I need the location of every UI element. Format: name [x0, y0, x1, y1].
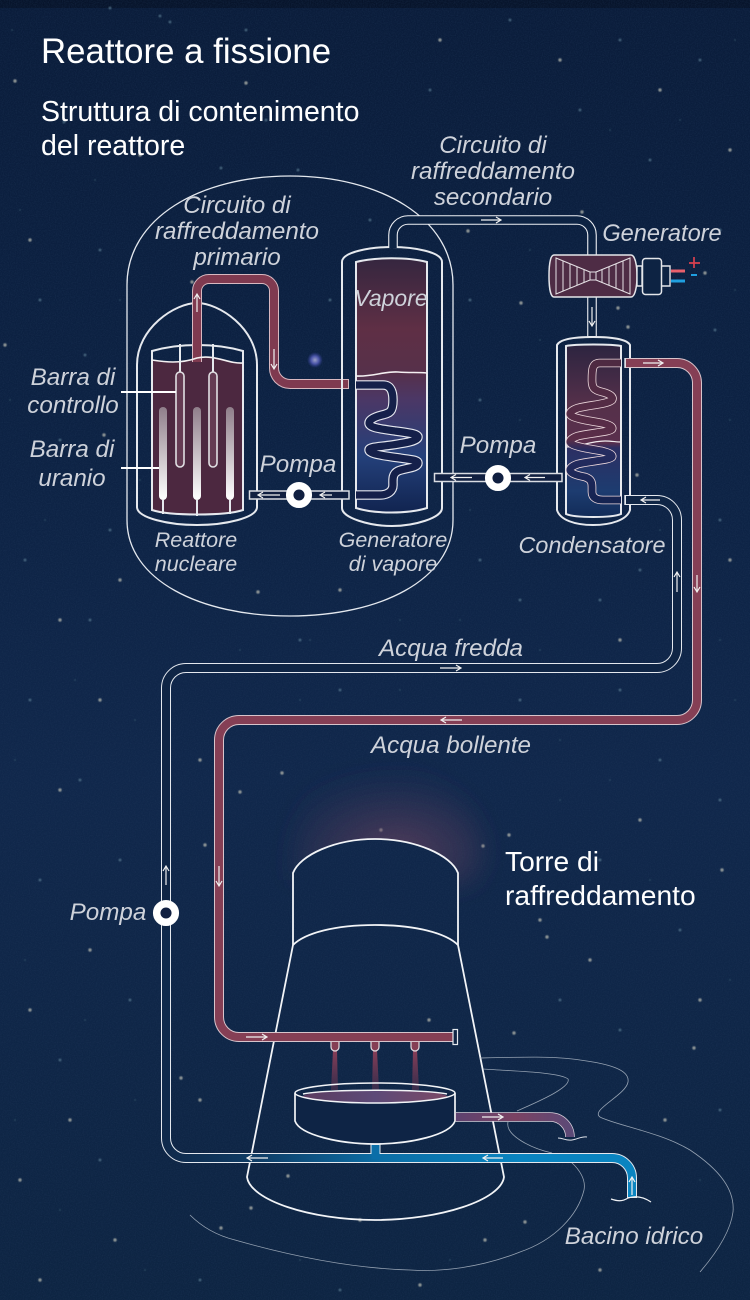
label: primary cooling circuit: Circuito di: [183, 192, 291, 219]
glowing blue star: [307, 352, 323, 368]
tower neck arc: [293, 925, 458, 945]
nuclear reactor: [137, 279, 349, 525]
condenser coil: [570, 363, 621, 500]
label: steam generator: Generatore: [339, 528, 447, 552]
label: secondary cooling circuit: raffreddamento: [411, 158, 575, 185]
cooling circuit: cold water pipe: [163, 495, 680, 1198]
generator body: [637, 266, 670, 286]
minus sign: [691, 274, 697, 276]
uranium rods: [159, 407, 234, 516]
steam generator fill: [356, 258, 427, 512]
primary cold pipe: [250, 491, 349, 499]
label: primary cooling circuit: primario: [192, 244, 281, 271]
water body shoreline: [190, 1057, 733, 1272]
label: generator: Generatore: [602, 221, 722, 247]
basin body: [295, 1093, 455, 1144]
basin in the tower: [295, 1083, 455, 1144]
reactor inner vessel: [152, 345, 243, 514]
turbine blades: [556, 258, 630, 294]
label: steam: Vapore: [354, 285, 428, 311]
pump: primary circuit: [290, 486, 308, 504]
label: nuclear reactor: Reattore: [155, 528, 237, 552]
label: primary cooling circuit: raffreddamento: [155, 218, 319, 245]
basin water: [303, 1090, 447, 1103]
outlet water ripple: [558, 1137, 587, 1140]
steam generator outer vessel: [342, 247, 442, 526]
turbine and generator: [549, 255, 700, 297]
title: Reattore a fissione: [41, 32, 331, 71]
cooling tower shell: [247, 839, 504, 1220]
label: pump primary: Pompa: [260, 451, 336, 478]
label: water body: Bacino idrico: [565, 1223, 703, 1250]
control rods: [176, 344, 217, 467]
water level: [356, 372, 427, 376]
label: uranium rod: Barra di: [30, 436, 115, 463]
label: steam generator: di vapore: [349, 552, 437, 576]
label: secondary cooling circuit: Circuito di: [439, 132, 547, 159]
condenser inner vessel: [566, 344, 621, 517]
label: pump secondary: Pompa: [460, 432, 536, 459]
label: cold water: Acqua fredda: [377, 635, 523, 662]
leader line: uranium rod: [121, 467, 159, 469]
spray nozzles and falling water: [331, 1042, 419, 1090]
label: control rod: controllo: [27, 392, 119, 419]
heading: cooling tower: Torre di: [505, 845, 599, 877]
turbine casing: [549, 255, 637, 297]
label: uranium rod: uranio: [38, 465, 106, 492]
pump: tower circuit: [157, 904, 175, 922]
steam generator inner vessel: [356, 258, 427, 512]
primary circuit flow arrows: [194, 294, 277, 369]
label: condenser: Condensatore: [519, 532, 665, 558]
negative wire: [671, 280, 685, 282]
heading: containment structure: del reattore: [41, 130, 185, 162]
cooling circuit: hot water pipe: [216, 358, 700, 1044]
basin outlet pipe: [455, 1114, 570, 1137]
label: secondary cooling circuit: secondario: [434, 184, 552, 211]
condenser outer vessel: [557, 337, 630, 525]
secondary circuit pipe: [393, 217, 595, 337]
intake water ripple: [611, 1197, 651, 1202]
tower upper cap: [293, 839, 458, 945]
cooling tower steam plume: [292, 782, 486, 889]
label: hot water: Acqua bollente: [369, 732, 531, 759]
containment structure outline: [127, 176, 453, 616]
label: control rod: Barra di: [31, 364, 116, 391]
steam generator: [342, 247, 442, 526]
basin rim: [295, 1083, 455, 1103]
leader line: control rod: [121, 391, 176, 393]
heading: containment structure: Struttura di contenimento: [41, 96, 359, 128]
water surface line: [152, 357, 243, 363]
steam generator coil: [356, 385, 418, 495]
reactor water: [152, 357, 243, 514]
pump: secondary circuit: [489, 469, 507, 487]
secondary return pipe: [434, 474, 562, 482]
label: nuclear reactor: nucleare: [155, 552, 237, 576]
primary hot pipe (reactor to steam generator): [197, 279, 349, 384]
plus sign: [689, 257, 700, 268]
positive wire: [671, 270, 685, 272]
tower body: [247, 945, 504, 1220]
water level: [566, 441, 621, 447]
condenser: [557, 337, 630, 525]
condenser fill: [566, 344, 621, 517]
label: pump tower: Pompa: [70, 899, 146, 926]
basin to cold pipe connector: [370, 1144, 380, 1159]
reactor outer vessel: [137, 303, 257, 525]
heading: cooling tower: raffreddamento: [505, 879, 696, 911]
